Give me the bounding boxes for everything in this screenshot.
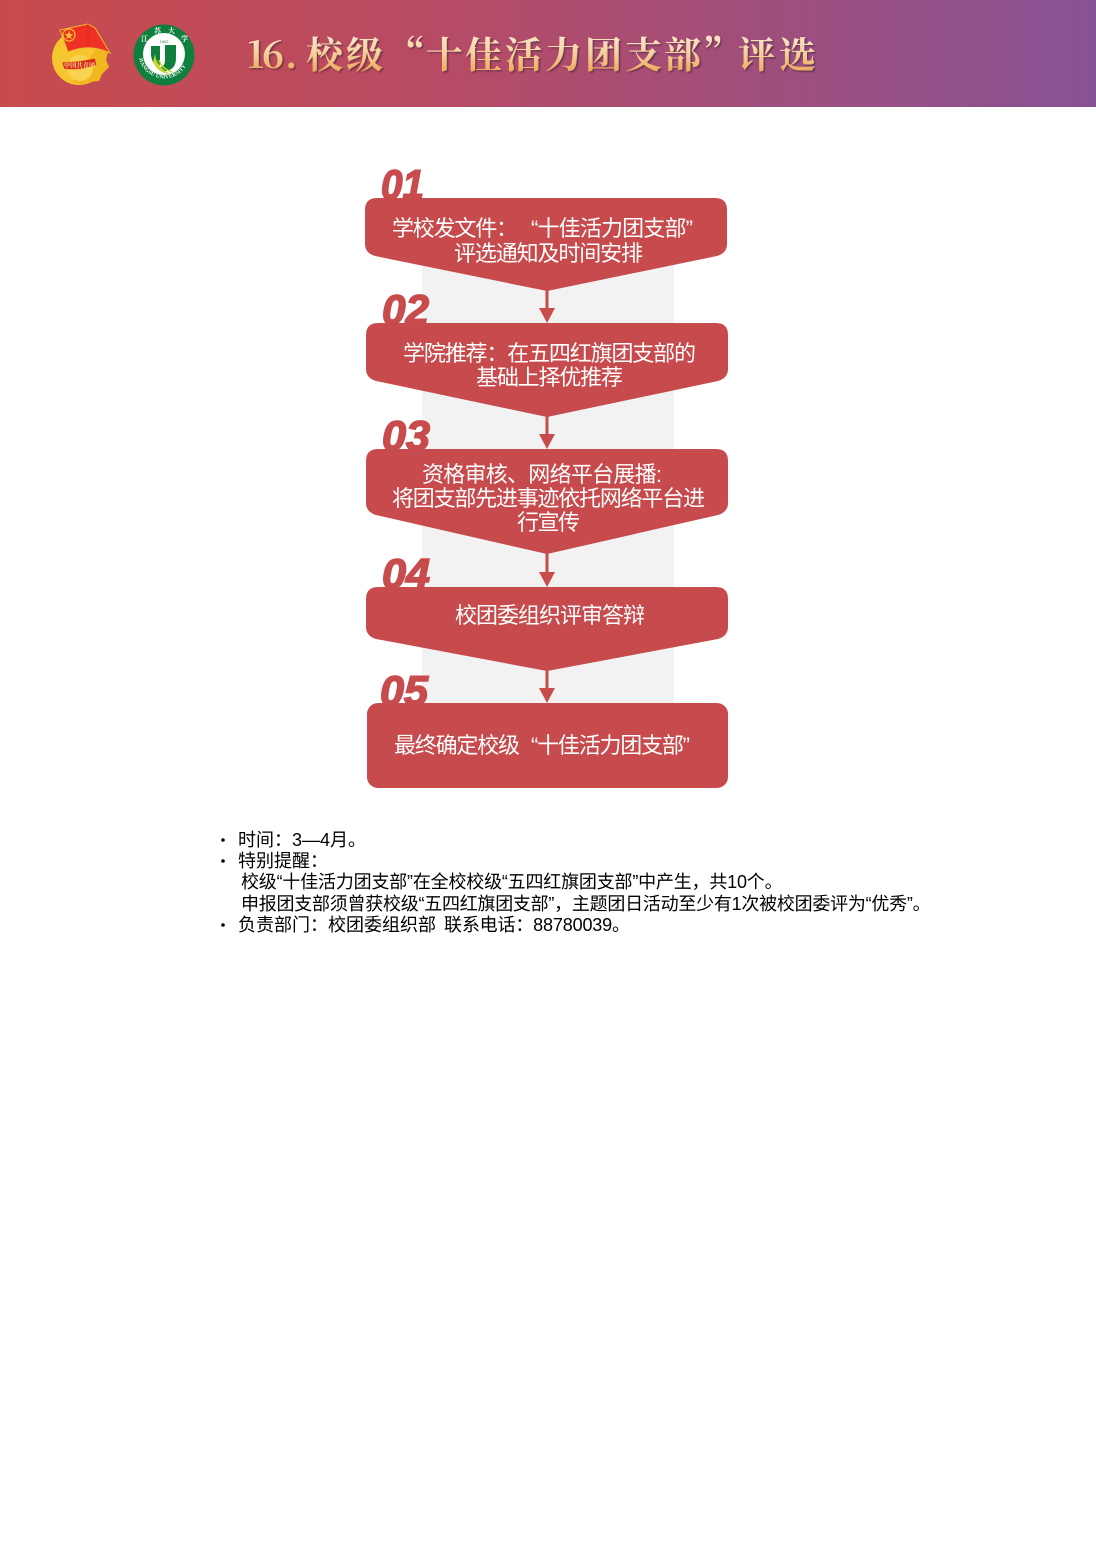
panel: step 3: 资格审核、网络平台展播: — [422, 462, 662, 487]
text block: notes: 申报团支部须曾获校级“五四红旗团支部”，主题团日活动至少有1次被校团委评为“优秀”。 — [241, 894, 931, 914]
text block: notes: 时间：3—4月。 — [238, 830, 366, 850]
text block: notes: 校级“十佳活力团支部”在全校校级“五四红旗团支部”中产生，共10个。 — [241, 872, 783, 892]
icon: youth league emblem: 中国共青团 — [64, 60, 95, 70]
panel: step 1 — [365, 198, 727, 291]
text block: notes: 特别提醒： — [238, 851, 328, 871]
text block: notes: 负责部门：校团委组织部 — [238, 915, 436, 935]
panel: step 5 — [367, 703, 728, 788]
text block: notes — [221, 830, 931, 935]
panel: step 3 — [366, 449, 728, 554]
panel: step 2: 学院推荐：在五四红旗团支部的 — [403, 341, 696, 366]
panel: step 1: “十佳活力团支部” — [531, 216, 693, 241]
step number 01: 01 — [381, 161, 424, 208]
step number 03: 03 — [382, 412, 430, 459]
panel: step 1: 评选通知及时间安排 — [454, 241, 643, 266]
icon: Jiangsu University emblem: 1902 — [160, 39, 169, 44]
panel: step 3: 行宣传 — [517, 510, 580, 535]
step number 02: 02 — [382, 286, 429, 333]
panel: step 3: 将团支部先进事迹依托网络平台进 — [392, 486, 705, 511]
panel: step 5: “十佳活力团支部” — [531, 733, 690, 758]
arrow: step 1 to 2 — [539, 288, 555, 323]
panel: step 1: 学校发文件： — [392, 216, 518, 241]
icon: Jiangsu University emblem: 学 — [181, 34, 188, 44]
panel: step 2: 基础上择优推荐 — [476, 365, 623, 390]
arrow: step 3 to 4 — [539, 551, 555, 587]
step number 04: 04 — [382, 550, 430, 597]
text block: notes: 联系电话：88780039。 — [444, 915, 630, 935]
icon: Jiangsu University emblem: 大 — [168, 26, 175, 36]
header banner — [0, 0, 1096, 107]
step number 05: 05 — [380, 667, 429, 714]
arrow: step 2 to 3 — [539, 414, 555, 449]
panel: step 5: 最终确定校级 — [394, 733, 520, 758]
title: 16.校级“十佳活力团支部”评选 — [247, 25, 816, 79]
panel: step 2 — [366, 323, 728, 417]
icon: youth league emblem — [52, 24, 110, 85]
icon: Jiangsu University emblem — [134, 24, 194, 86]
icon: Jiangsu University emblem: JIANGSU UNIVERSITY — [139, 58, 186, 78]
panel: grey backing column — [422, 250, 674, 710]
panel: step 4 — [366, 587, 728, 671]
icon: Jiangsu University emblem: 江 — [141, 34, 148, 44]
arrow: step 4 to 5 — [539, 668, 555, 703]
panel: step 4: 校团委组织评审答辩 — [455, 603, 645, 628]
icon: Jiangsu University emblem: 苏 — [154, 26, 162, 36]
